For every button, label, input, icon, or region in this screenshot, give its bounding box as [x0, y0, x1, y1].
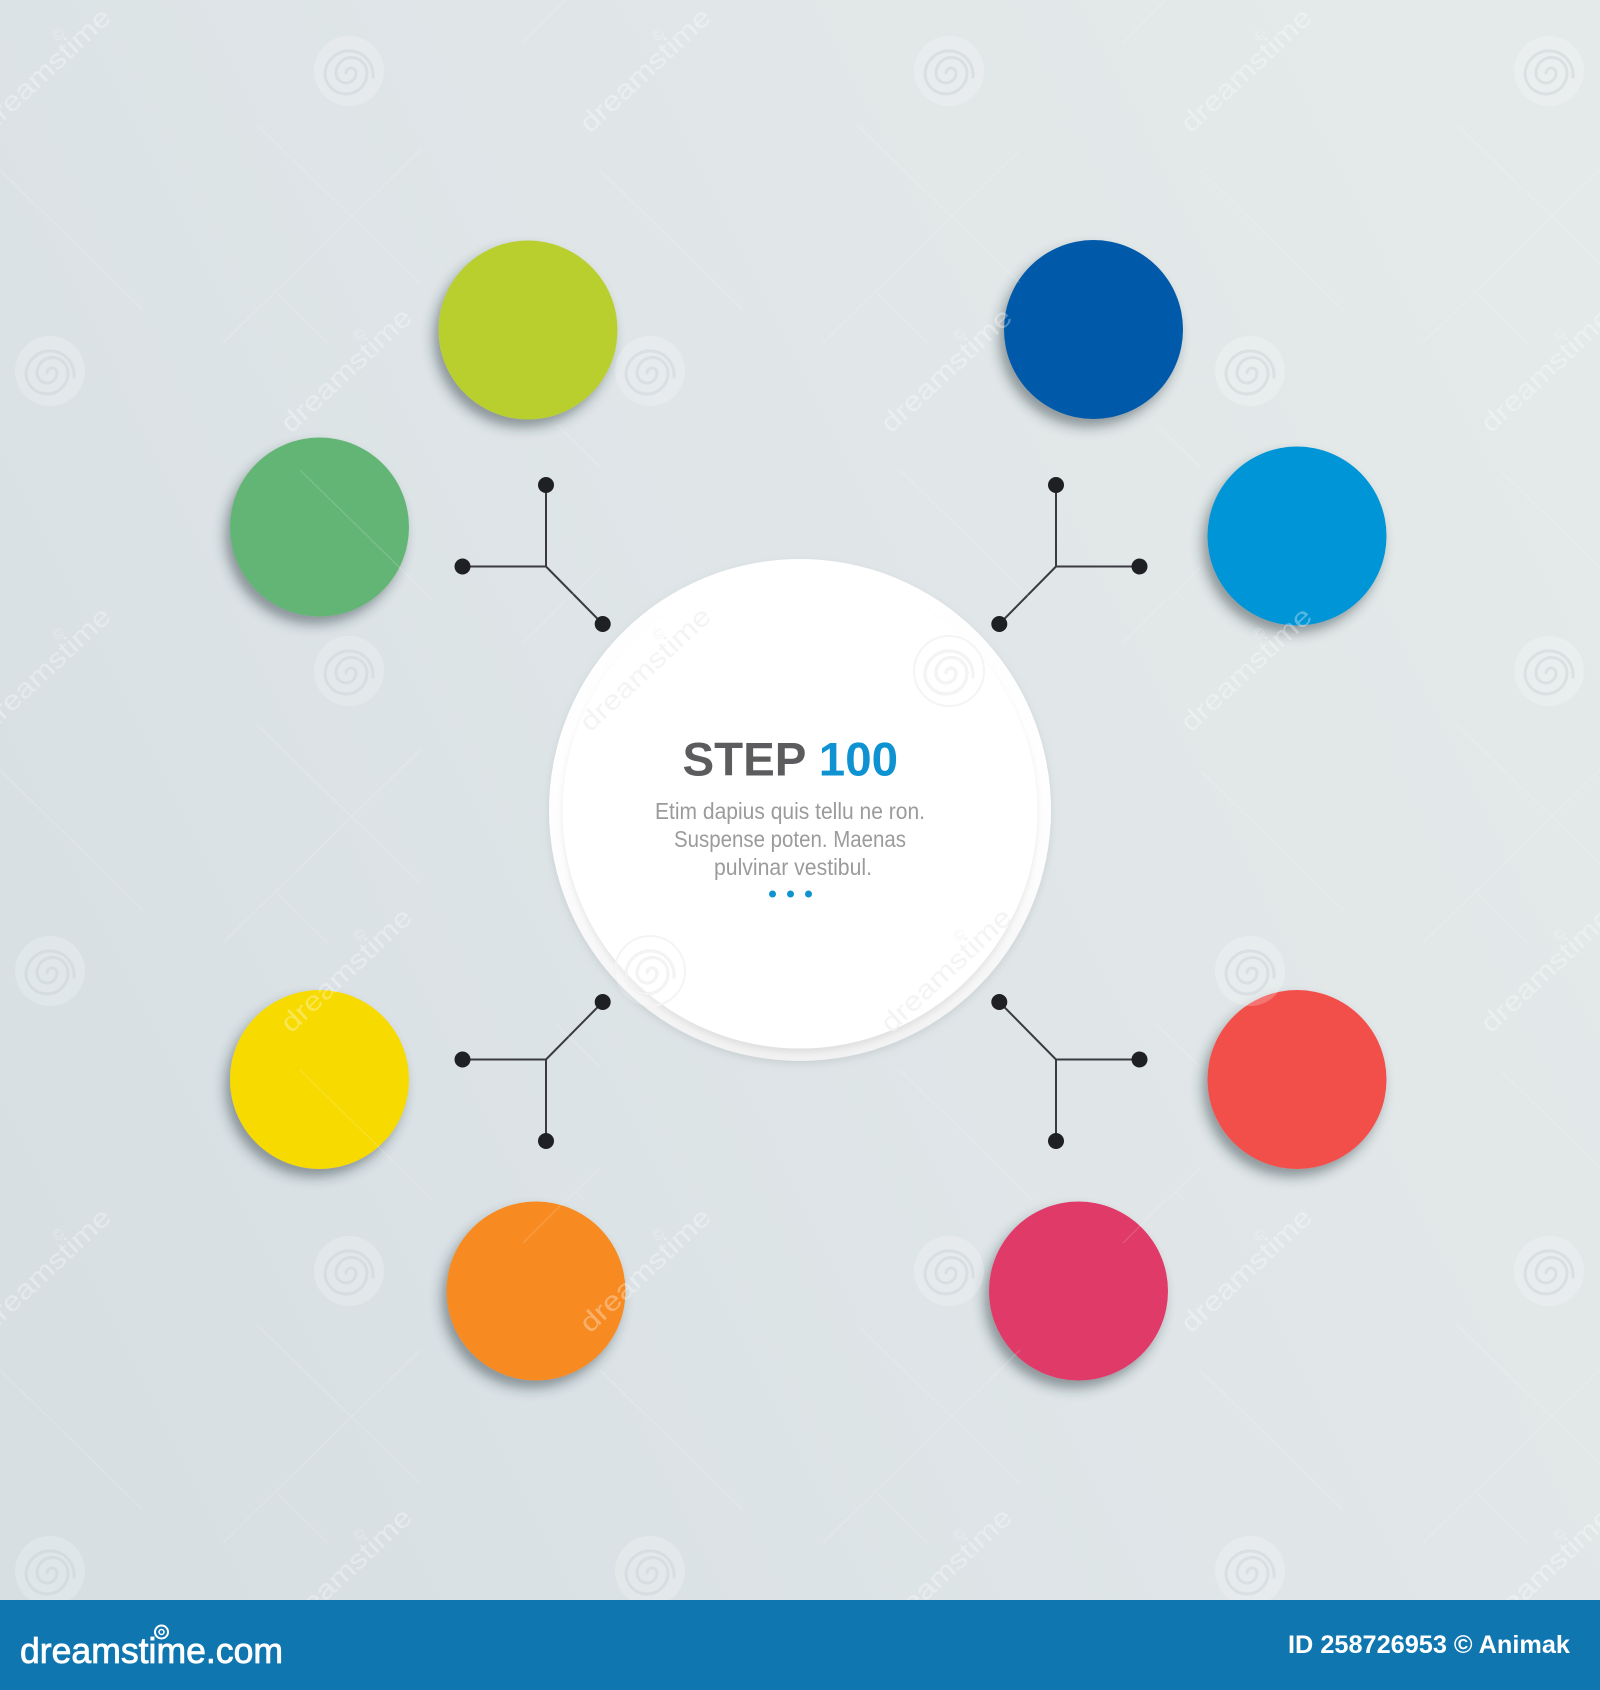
panel: central white disc [549, 559, 1051, 1061]
watermark layer: © [649, 1225, 668, 1245]
watermark layer: dreamstime [1475, 1502, 1600, 1638]
watermark layer: dreamstime [875, 302, 1018, 438]
connector: top right [991, 477, 1148, 632]
connector: bottom right [991, 994, 1148, 1149]
watermark on central disc: dreamstime [574, 601, 717, 737]
circle: lime green [438, 240, 618, 420]
text block: description [655, 798, 925, 880]
watermark layer: © [49, 25, 68, 45]
watermark layer: © [1250, 624, 1269, 644]
watermark layer: © [1250, 25, 1269, 45]
watermark on central disc: © [649, 624, 668, 644]
circle: orange [446, 1202, 626, 1380]
watermark on central disc: dreamstime [875, 902, 1018, 1038]
circle: dark blue [1004, 240, 1183, 419]
watermark layer: © [950, 325, 969, 345]
watermark layer: © [1550, 925, 1569, 945]
text block: description: Suspense poten. Maenas [674, 826, 906, 852]
watermark layer: © [649, 25, 668, 45]
watermark layer: © [350, 325, 369, 345]
watermark layer: dreamstime [1475, 302, 1600, 438]
watermark layer: © [350, 1525, 369, 1545]
watermark on central disc [584, 612, 1010, 1031]
footer bar [0, 1600, 1600, 1690]
connector: top left [454, 477, 611, 632]
footer credit: ID 258726953 © Animak [1288, 1631, 1570, 1659]
watermark layer: dreamstime [1475, 902, 1600, 1038]
watermark layer: dreamstime [275, 902, 418, 1038]
watermark layer: dreamstime [275, 302, 418, 438]
watermark layer: dreamstime [574, 2, 717, 138]
text block: description: Etim dapius quis tellu ne ron. [655, 798, 925, 824]
watermark layer: © [950, 1525, 969, 1545]
text block: description: pulvinar vestibul. [714, 854, 872, 880]
watermark layer: dreamstime [574, 1202, 717, 1338]
three blue dots [769, 890, 812, 898]
watermark layer: © [1250, 1225, 1269, 1245]
heading: STEP 100: STEP 100 [682, 732, 898, 786]
watermark layer: © [1550, 325, 1569, 345]
circle: green [230, 438, 409, 616]
watermark on central disc: © [950, 925, 969, 945]
connector: bottom left [454, 994, 611, 1149]
watermark layer: © [350, 925, 369, 945]
watermark layer: dreamstime [275, 1502, 418, 1638]
circle: yellow [230, 990, 409, 1169]
watermark layer: © [49, 1225, 68, 1245]
watermark layer: dreamstime [1175, 601, 1318, 737]
watermark layer: © [1550, 1525, 1569, 1545]
watermark layer: dreamstime [1175, 1202, 1318, 1338]
watermark layer: © [49, 624, 68, 644]
circle: light blue [1208, 446, 1386, 626]
watermark layer: dreamstime [875, 1502, 1018, 1638]
circle: red [1208, 990, 1386, 1169]
footer logo: dreamstime.com: dreamstime.com [20, 1630, 283, 1671]
circle: pink [989, 1202, 1168, 1380]
watermark layer: dreamstime [1175, 2, 1318, 138]
